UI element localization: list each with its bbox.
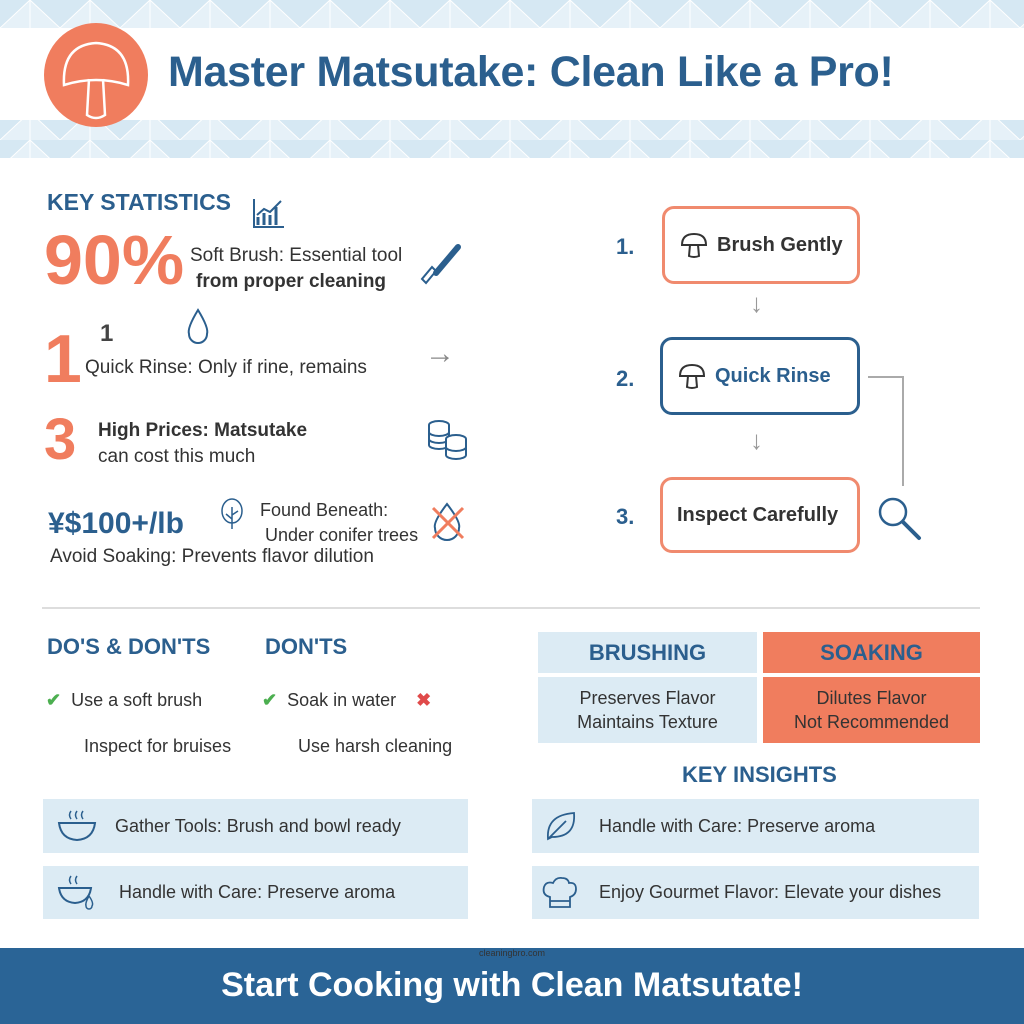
panel: insight aroma <box>532 799 979 853</box>
panel: insight aroma: Handle with Care: Preserve aroma <box>599 816 875 836</box>
flowchart: cleaning steps: 2. <box>616 366 634 391</box>
stat 90%: 90% <box>44 221 184 299</box>
header pattern band <box>0 0 1024 158</box>
icon: brush <box>420 244 461 284</box>
comparison table: Dilutes Flavor <box>816 688 927 708</box>
panel: key statistics: Found Beneath: <box>260 500 388 520</box>
step 3: Inspect Carefully <box>677 504 838 526</box>
panel: insight gourmet <box>532 866 979 919</box>
comparison table: BRUSHING <box>589 640 706 665</box>
arrow: ↓ <box>750 288 763 318</box>
panel: handle with care: Handle with Care: Preserve aroma <box>119 882 395 902</box>
flowchart: cleaning steps <box>616 206 922 553</box>
panel: key statistics: High Prices: Matsutake <box>98 420 307 441</box>
panel: do's and don'ts: Use harsh cleaning <box>298 736 452 756</box>
icon: arrow: → <box>425 337 455 370</box>
icon: coins <box>428 420 467 460</box>
panel: do's and don'ts <box>46 634 452 756</box>
heading: KEY STATISTICS <box>47 189 231 215</box>
icon: chart <box>253 199 284 228</box>
panel: key statistics: can cost this much <box>98 446 255 467</box>
comparison table <box>538 632 980 743</box>
icon: tree <box>221 498 243 529</box>
step 1 <box>662 206 860 284</box>
panel: do's and don'ts: DON'TS <box>265 634 347 659</box>
flowchart: cleaning steps: 1. <box>616 234 634 259</box>
title: Master Matsutake: Clean Like a Pro! <box>168 48 894 96</box>
footer banner: Start Cooking with Clean Matsutate! <box>221 966 803 1004</box>
heading: key insights: KEY INSIGHTS <box>682 762 837 787</box>
step 2: Quick Rinse <box>715 364 831 386</box>
panel: do's and don'ts: ✔ Soak in water ✖ <box>262 690 431 710</box>
step 1: Brush Gently <box>717 234 843 256</box>
footer banner <box>0 948 1024 1024</box>
panel: do's and don'ts: ✔ Use a soft brush <box>46 690 202 710</box>
stat 3: 3 <box>44 407 76 472</box>
panel: do's and don'ts: Inspect for bruises <box>84 736 231 756</box>
panel: key statistics <box>44 189 467 567</box>
step 2 <box>660 337 860 415</box>
panel: key statistics: 1 <box>100 320 113 347</box>
icon: no water <box>432 502 464 541</box>
comparison table: SOAKING <box>820 640 923 665</box>
panel: key statistics: from proper cleaning <box>196 271 386 292</box>
footer banner: cleaningbro.com <box>479 948 545 958</box>
panel: gather tools <box>43 799 468 853</box>
step 3 <box>660 477 860 553</box>
panel: gather tools: Gather Tools: Brush and bowl ready <box>115 816 401 836</box>
stat price: ¥$100+/lb <box>48 507 184 540</box>
panel: key statistics: Soft Brush: Essential tool <box>190 245 402 266</box>
panel: key statistics: Quick Rinse: Only if rine, remains <box>85 357 367 378</box>
panel: handle with care <box>43 866 468 919</box>
icon: mushroom logo <box>44 23 148 127</box>
connector <box>868 376 904 486</box>
icon: drop <box>188 308 208 344</box>
comparison table: Maintains Texture <box>577 712 718 732</box>
panel: insight gourmet: Enjoy Gourmet Flavor: Elevate your dishes <box>599 882 941 902</box>
panel: key statistics: Under conifer trees <box>265 525 418 545</box>
arrow: ↓ <box>750 425 763 455</box>
comparison table: Not Recommended <box>794 712 949 732</box>
panel: do's and don'ts: DO'S & DON'TS <box>47 634 210 659</box>
comparison table: Preserves Flavor <box>579 688 716 708</box>
stat 1: 1 <box>44 321 82 397</box>
icon: magnifier <box>878 498 922 540</box>
panel: key statistics: Avoid Soaking: Prevents flavor dilution <box>50 546 374 567</box>
flowchart: cleaning steps: 3. <box>616 504 634 529</box>
